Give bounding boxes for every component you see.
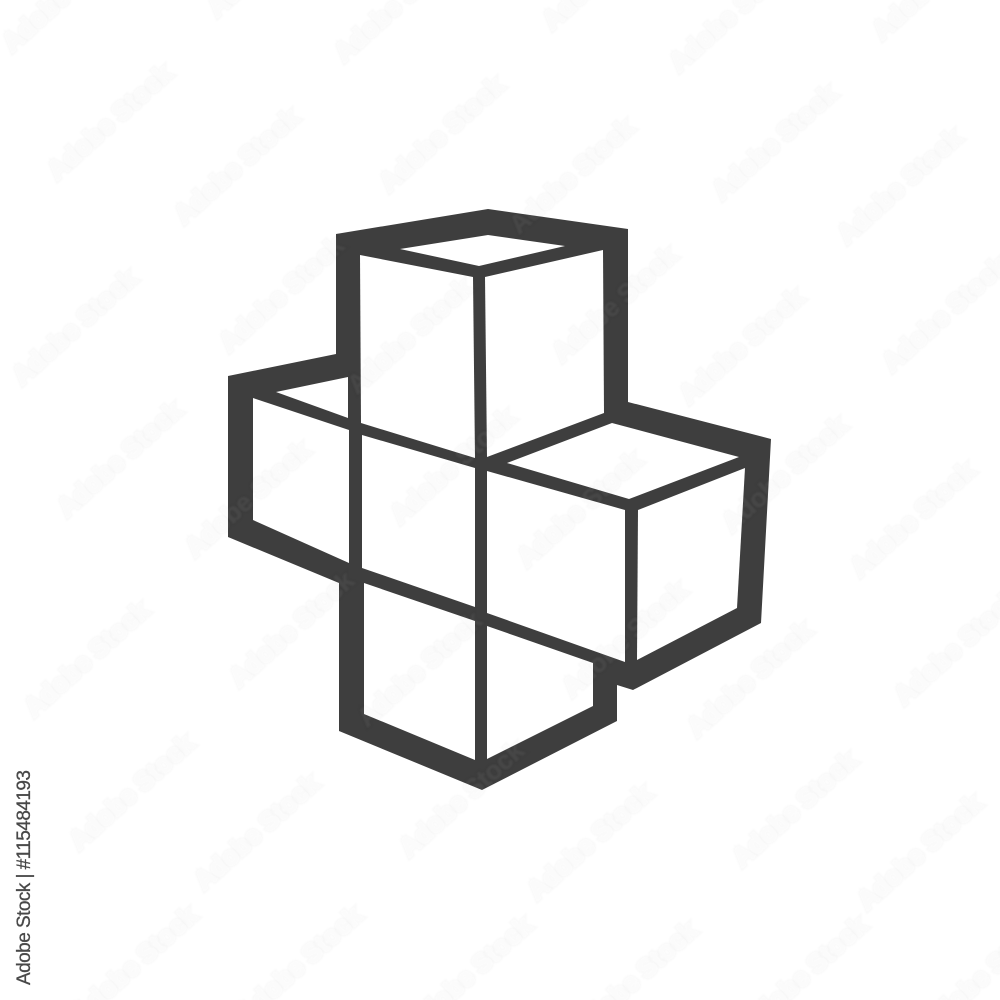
watermark pattern: Adobe Stock bbox=[521, 778, 658, 905]
left cube faces bbox=[253, 377, 349, 563]
watermark pattern: Adobe Stock bbox=[179, 435, 316, 562]
watermark pattern: Adobe Stock bbox=[51, 395, 188, 522]
watermark pattern: Adobe Stock bbox=[384, 402, 521, 529]
watermark pattern: Adobe Stock bbox=[546, 240, 683, 367]
watermark pattern: Adobe Stock bbox=[393, 735, 530, 862]
watermark pattern: Adobe Stock bbox=[18, 595, 155, 722]
watermark pattern: Adobe Stock bbox=[511, 445, 648, 572]
watermark pattern: Adobe Stock bbox=[844, 455, 981, 582]
watermark pattern: Adobe Stock bbox=[188, 768, 325, 895]
watermark pattern: Adobe Stock bbox=[373, 70, 510, 197]
watermark pattern: Adobe Stock bbox=[213, 230, 350, 357]
icon silhouette bbox=[228, 209, 771, 790]
watermark pattern: Adobe Stock bbox=[556, 575, 693, 702]
vertical stock id text: Adobe Stock | #115484193 bbox=[14, 770, 35, 985]
right cube faces bbox=[487, 423, 745, 662]
watermark pattern: Adobe Stock bbox=[726, 745, 863, 872]
top cube faces bbox=[360, 235, 604, 458]
watermark pattern: Adobe Stock bbox=[673, 282, 810, 409]
watermark pattern: Adobe Stock bbox=[706, 78, 843, 205]
watermark pattern: Adobe Stock bbox=[831, 122, 968, 249]
icon: cross made of isometric cubes bbox=[228, 209, 771, 790]
bottom cube faces bbox=[364, 583, 593, 760]
watermark pattern: Adobe Stock bbox=[41, 58, 178, 185]
watermark pattern: Adobe Stock bbox=[223, 565, 360, 692]
centre cube face bbox=[362, 435, 475, 607]
watermark pattern: Adobe Stock bbox=[6, 263, 143, 390]
watermark pattern: Adobe Stock bbox=[63, 728, 200, 855]
watermark pattern: Adobe Stock bbox=[503, 112, 640, 239]
watermark pattern: Adobe Stock bbox=[351, 605, 488, 732]
watermark pattern: Adobe Stock bbox=[168, 102, 305, 229]
watermark pattern: Adobe Stock bbox=[716, 410, 853, 537]
watermark pattern: Adobe Stock bbox=[851, 788, 988, 915]
watermark pattern: Adobe Stock bbox=[341, 272, 478, 399]
watermark pattern: Adobe Stock bbox=[681, 615, 818, 742]
